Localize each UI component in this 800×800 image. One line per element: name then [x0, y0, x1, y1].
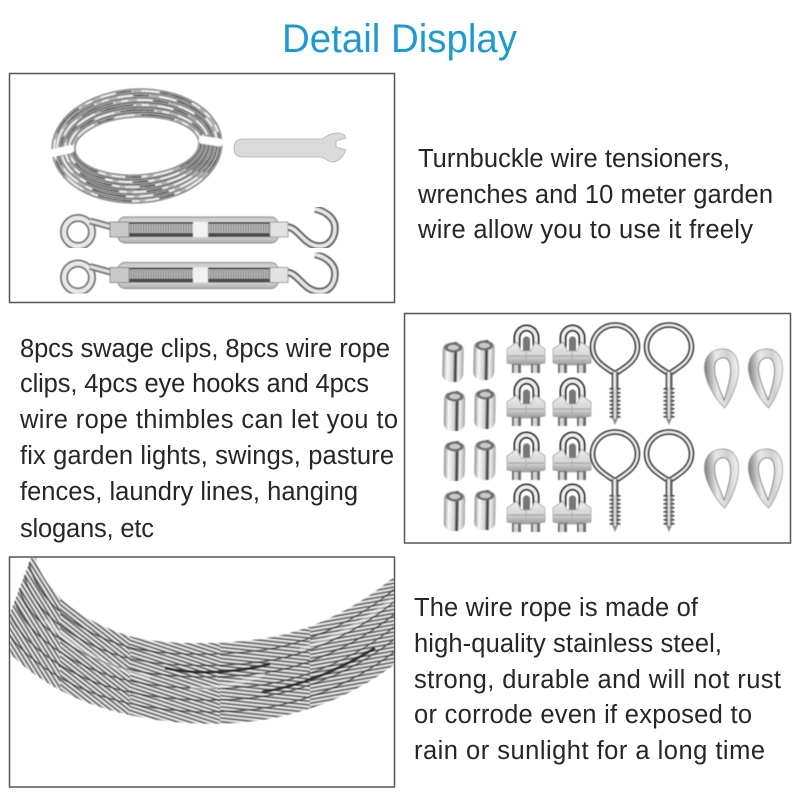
title: Detail Display	[282, 17, 517, 61]
wrench	[234, 133, 346, 162]
text: accessories description: fences, laundry lines, hanging	[20, 478, 358, 506]
panel border	[404, 314, 790, 543]
text: turnbuckle description: wire allow you to use it freely	[417, 216, 753, 244]
panel: wire rope close-up	[0, 550, 400, 787]
text: turnbuckle description	[417, 145, 773, 244]
swage clips	[442, 340, 496, 531]
panel: turnbuckle kit	[10, 74, 394, 302]
eye hooks	[592, 325, 692, 532]
turnbuckle bottom	[64, 254, 335, 292]
text: accessories description	[19, 335, 398, 543]
text: wire rope description: or corrode even if exposed to	[414, 701, 752, 729]
text: turnbuckle description: wrenches and 10 meter garden	[417, 181, 773, 209]
text: accessories description: wire rope thimbles can let you to	[19, 406, 398, 434]
text: wire rope description: strong, durable and will not rust	[414, 666, 781, 694]
wire rope strands	[0, 550, 400, 724]
text: accessories description: clips, 4pcs eye hooks and 4pcs	[20, 370, 369, 398]
text: wire rope description: rain or sunlight for a long time	[414, 737, 765, 765]
panel: accessories	[404, 314, 790, 543]
text: turnbuckle description: Turnbuckle wire tensioners,	[418, 145, 730, 173]
wire rope coil	[47, 87, 226, 206]
wire rope thimbles	[704, 348, 785, 509]
text: accessories description: 8pcs swage clips, 8pcs wire rope	[20, 335, 390, 363]
text: accessories description: slogans, etc	[20, 515, 154, 543]
text: accessories description: fix garden lights, swings, pasture	[20, 442, 394, 470]
panel border	[10, 74, 394, 302]
text: wire rope description: The wire rope is made of	[414, 594, 699, 622]
turnbuckle top	[64, 209, 335, 246]
text: wire rope description	[414, 594, 781, 765]
text: wire rope description: high-quality stainless steel,	[414, 630, 722, 658]
panel border	[10, 557, 394, 787]
wire rope clips	[507, 328, 591, 532]
